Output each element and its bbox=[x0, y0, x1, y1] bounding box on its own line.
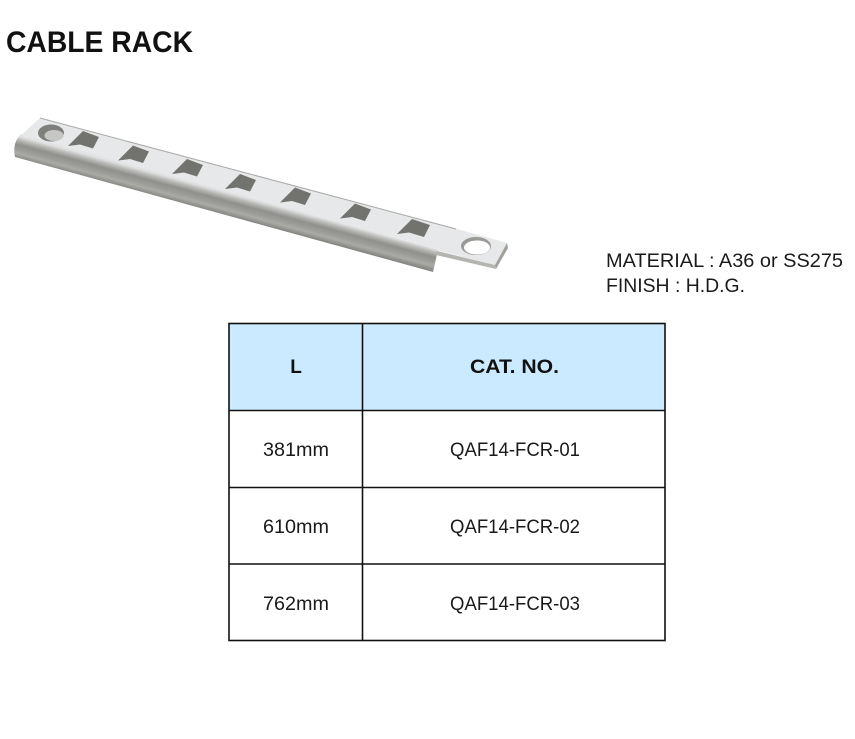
header: CAT. NO.: CAT. NO. bbox=[470, 357, 559, 378]
row 2: QAF14-FCR-02 bbox=[450, 517, 580, 538]
back edge line bbox=[40, 118, 456, 229]
round hole, right bbox=[461, 237, 491, 255]
row 2 bbox=[263, 517, 580, 538]
row 1: 381mm bbox=[263, 440, 329, 461]
table grid bbox=[229, 324, 665, 640]
material and finish note bbox=[606, 251, 843, 297]
title: CABLE RACK bbox=[6, 26, 193, 59]
row 1 bbox=[263, 440, 580, 461]
tab edge bbox=[495, 243, 508, 269]
round hole, left bbox=[38, 124, 64, 142]
row 2: 610mm bbox=[263, 517, 329, 538]
top face of rack bbox=[18, 118, 507, 265]
row 3 bbox=[263, 594, 580, 615]
slots bbox=[68, 131, 430, 237]
header: L: L bbox=[290, 357, 302, 378]
table bbox=[229, 324, 665, 640]
illustration: cable rack bar bbox=[14, 118, 508, 272]
material and finish note: MATERIAL : A36 or SS275 bbox=[606, 251, 843, 272]
row 3: 762mm bbox=[263, 594, 329, 615]
row 3: QAF14-FCR-03 bbox=[450, 594, 580, 615]
curved front flange bbox=[14, 134, 438, 272]
table header background bbox=[229, 324, 665, 410]
material and finish note: FINISH : H.D.G. bbox=[606, 276, 745, 297]
row 1: QAF14-FCR-01 bbox=[450, 440, 580, 461]
